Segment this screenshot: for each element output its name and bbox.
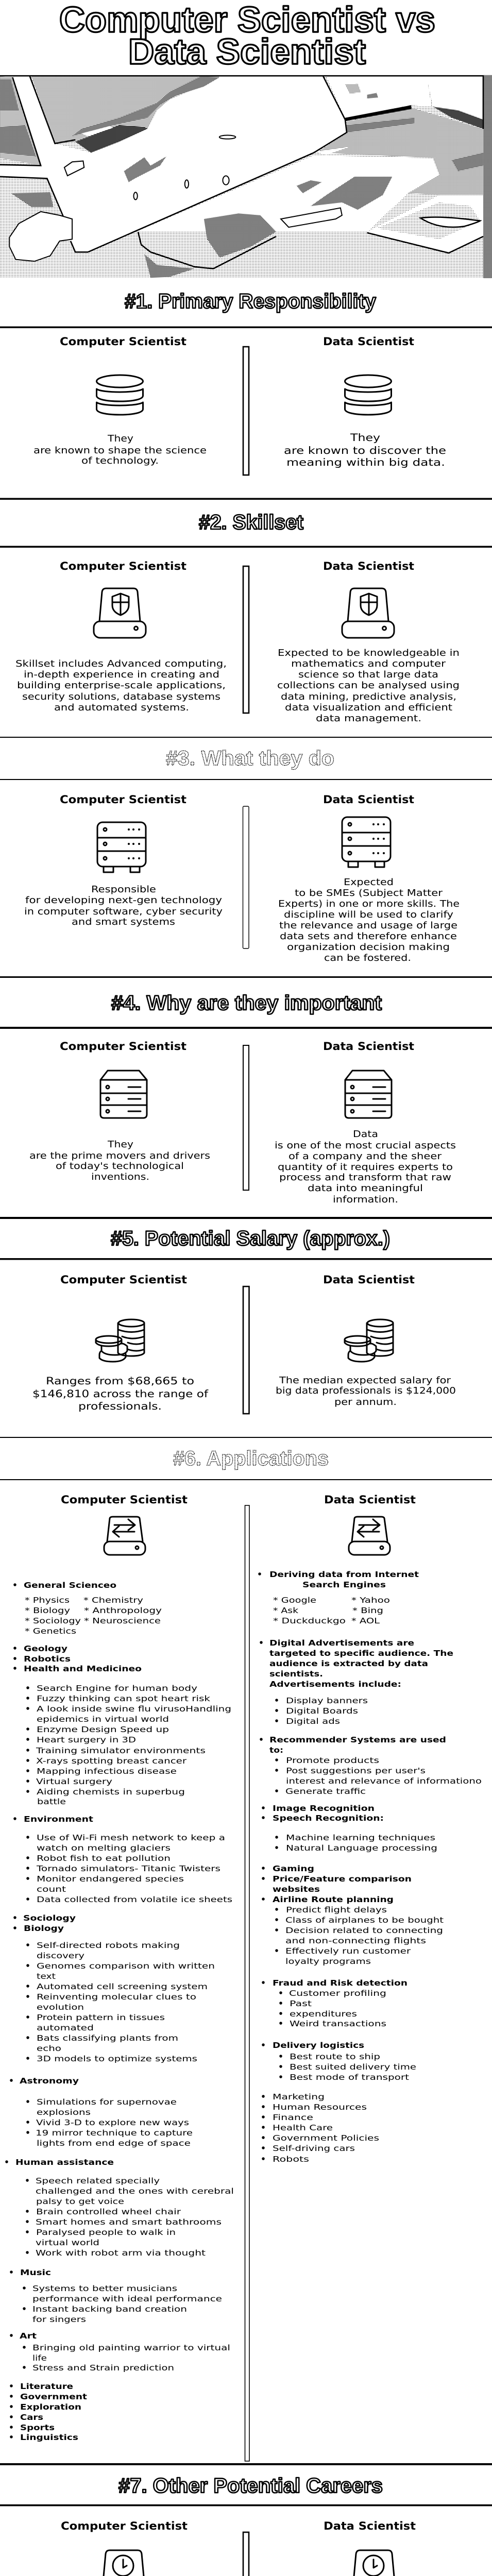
list: computer scientist applications: * Sociology bbox=[25, 1616, 81, 1625]
text: data scientist: information. bbox=[333, 1195, 398, 1205]
list: computer scientist applications: Mapping infectious disease bbox=[37, 1767, 177, 1776]
text: data scientist: big data professionals is $124,000 bbox=[276, 1386, 456, 1396]
text: computer scientist: and automated systems. bbox=[54, 703, 189, 713]
text: computer scientist: inventions. bbox=[91, 1172, 149, 1182]
column heading: Data Scientist bbox=[323, 1040, 414, 1053]
list: computer scientist applications: watch on melting glaciers bbox=[37, 1843, 171, 1853]
icon: drawer server bbox=[100, 1071, 147, 1118]
column separator bbox=[243, 347, 249, 475]
divider bbox=[0, 1027, 492, 1029]
list: data scientist applications: expenditures bbox=[290, 2009, 357, 2019]
list: data scientist applications: Display banners bbox=[286, 1696, 368, 1705]
list: computer scientist applications: Data collected from volatile ice sheets bbox=[37, 1895, 232, 1904]
list: computer scientist applications: Government bbox=[20, 2392, 88, 2401]
list: data scientist applications bbox=[269, 1570, 482, 2164]
column heading: Data Scientist bbox=[323, 560, 414, 572]
list: computer scientist applications: Vivid 3-D to explore new ways bbox=[36, 2118, 189, 2127]
text: data scientist: Expected to be knowledgeable in bbox=[278, 648, 460, 658]
list: computer scientist applications: Heart surgery in 3D bbox=[37, 1735, 136, 1744]
text: computer scientist: of today's technological bbox=[56, 1161, 184, 1172]
list: computer scientist applications: 3D models to optimize systems bbox=[37, 2054, 197, 2063]
icon: server rack bbox=[342, 817, 391, 867]
list: computer scientist applications: Music bbox=[20, 2268, 51, 2277]
panel: what they do bbox=[24, 793, 460, 963]
text: computer scientist: in computer software, cyber security bbox=[24, 907, 223, 917]
list: data scientist applications: Best route to ship bbox=[290, 2052, 380, 2061]
list: computer scientist applications: Training simulator environments bbox=[36, 1746, 206, 1755]
text: computer scientist: for developing next-gen technology bbox=[25, 895, 222, 906]
list: data scientist applications: Weird transactions bbox=[290, 2019, 386, 2028]
heading: #3 What they do: #3. What they do bbox=[166, 747, 334, 770]
text: data scientist bbox=[275, 1129, 456, 1205]
text: computer scientist: are known to shape the science bbox=[33, 446, 207, 456]
list: computer scientist applications: Simulations for supernovae bbox=[37, 2097, 177, 2107]
text: data scientist bbox=[284, 432, 446, 468]
list: data scientist applications: loyalty programs bbox=[285, 1957, 371, 1966]
list: data scientist applications: Robots bbox=[273, 2155, 309, 2164]
text: computer scientist: security solutions, database systems bbox=[22, 692, 220, 702]
text: computer scientist: They bbox=[107, 434, 133, 444]
text: data scientist: discipline will be used to clarify bbox=[284, 910, 453, 920]
list: computer scientist applications: Bats classifying plants from bbox=[37, 2033, 178, 2043]
list: data scientist applications: scientists. bbox=[269, 1669, 323, 1679]
column heading: Computer Scientist bbox=[60, 1274, 187, 1286]
column separator bbox=[243, 2532, 249, 2576]
panel: primary responsibility bbox=[33, 335, 446, 475]
heading: #2 Skillset: #2. Skillset bbox=[199, 511, 303, 534]
list: computer scientist applications: * Biology bbox=[25, 1606, 70, 1615]
column separator bbox=[243, 1045, 249, 1190]
text: data scientist bbox=[276, 1376, 456, 1408]
text: data scientist: data mining, predictive analysis, bbox=[281, 692, 456, 702]
list: data scientist applications: Best suited delivery time bbox=[290, 2062, 416, 2072]
column heading: Data Scientist bbox=[324, 2520, 416, 2532]
list: computer scientist applications: Astronomy bbox=[20, 2076, 79, 2086]
list: data scientist applications: to: bbox=[269, 1745, 283, 1755]
icon: database bbox=[345, 375, 392, 415]
list: data scientist applications: Health Care bbox=[273, 2123, 333, 2132]
text: computer scientist: Ranges from $68,665 to bbox=[46, 1375, 194, 1387]
hero image: dithered desk with laptop and Hadoop elephant bbox=[0, 75, 492, 278]
text: data scientist: organization decision making bbox=[287, 942, 450, 953]
list: computer scientist applications: Health and Medicineo bbox=[24, 1664, 142, 1673]
list: data scientist applications: websites bbox=[273, 1885, 320, 1894]
list: computer scientist applications: automated bbox=[37, 2023, 94, 2032]
list: data scientist applications: * Yahoo bbox=[351, 1596, 390, 1605]
list: computer scientist applications: A look inside swine flu virusoHandling bbox=[37, 1704, 231, 1714]
list: computer scientist applications: explosions bbox=[37, 2108, 91, 2117]
divider bbox=[0, 779, 492, 780]
list: computer scientist applications: Exploration bbox=[20, 2402, 81, 2412]
panel: applications bbox=[7, 1494, 482, 2461]
heading: #6 Applications: #6. Applications bbox=[173, 1447, 329, 1470]
list: computer scientist applications: * Physics bbox=[25, 1596, 70, 1605]
icon: coin stacks bbox=[96, 1319, 144, 1362]
text: computer scientist bbox=[29, 1140, 210, 1182]
divider bbox=[0, 498, 492, 500]
list: computer scientist applications: Self-directed robots making bbox=[37, 1941, 180, 1950]
text: data scientist: Expected bbox=[344, 877, 394, 888]
list: computer scientist applications: discovery bbox=[37, 1951, 84, 1960]
text: computer scientist bbox=[33, 434, 207, 466]
list: data scientist applications: Search Engines bbox=[302, 1580, 386, 1589]
list: computer scientist applications: Tornado simulators- Titanic Twisters bbox=[36, 1864, 220, 1873]
title: Computer Scientist vs bbox=[59, 0, 435, 40]
panel: why they are important bbox=[29, 1040, 456, 1205]
list: data scientist applications: audience is extracted by data bbox=[269, 1659, 428, 1668]
list: computer scientist applications: General Scienceo bbox=[24, 1581, 116, 1590]
divider bbox=[0, 1217, 492, 1219]
text: data scientist: data management. bbox=[316, 714, 421, 724]
list: data scientist applications: Advertisements include: bbox=[269, 1680, 401, 1689]
list: data scientist applications: * Ask bbox=[273, 1606, 298, 1615]
list: computer scientist applications: Speech related specially bbox=[36, 2176, 160, 2185]
list: computer scientist applications: * Anthropology bbox=[84, 1606, 162, 1615]
list: computer scientist applications: Automated cell screening system bbox=[37, 1982, 208, 1991]
list: computer scientist applications: Brain controlled wheel chair bbox=[36, 2207, 181, 2216]
text: computer scientist: in-depth experience in creating and bbox=[24, 670, 219, 680]
text: data scientist: of a company and the sheer bbox=[289, 1151, 442, 1162]
text: data scientist: data sets and therefore enhance bbox=[280, 931, 457, 942]
text: data scientist: are known to discover the bbox=[284, 445, 446, 456]
list: data scientist applications: Digital ads bbox=[286, 1717, 340, 1726]
list: data scientist applications: Speech Recognition: bbox=[273, 1814, 384, 1823]
text: data scientist: the relevance and usage of large bbox=[279, 921, 457, 931]
list: computer scientist applications: Human assistance bbox=[15, 2158, 114, 2167]
text: data scientist: can be fostered. bbox=[324, 953, 411, 963]
list: computer scientist applications: Fuzzy thinking can spot heart risk bbox=[37, 1694, 210, 1703]
text: computer scientist: They bbox=[107, 1140, 133, 1150]
text: computer scientist: building enterprise-scale applications, bbox=[17, 681, 226, 691]
list: computer scientist applications: Genomes comparison with written bbox=[37, 1961, 215, 1971]
list: data scientist applications: Human Resources bbox=[273, 2103, 367, 2112]
text: data scientist bbox=[278, 877, 460, 963]
list: data scientist applications: * AOL bbox=[351, 1616, 380, 1625]
list: computer scientist applications: Search Engine for human body bbox=[37, 1684, 197, 1693]
list: data scientist applications: Marketing bbox=[273, 2092, 325, 2102]
list: computer scientist applications: Sports bbox=[20, 2423, 55, 2432]
list: computer scientist applications: X-rays spotting breast cancer bbox=[36, 1756, 187, 1766]
text: data scientist: The median expected salary for bbox=[279, 1376, 451, 1386]
list: computer scientist applications: echo bbox=[37, 2044, 61, 2053]
list: data scientist applications: Predict flight delays bbox=[286, 1905, 387, 1914]
list: data scientist applications: Post suggestions per user's bbox=[286, 1766, 426, 1775]
list: data scientist applications: Image Recognition bbox=[273, 1804, 375, 1813]
list: computer scientist applications: for singers bbox=[32, 2315, 86, 2324]
list: computer scientist applications: Cars bbox=[20, 2413, 43, 2422]
heading: #1 Primary Responsibility: #1. Primary Responsibility bbox=[125, 290, 377, 313]
text: data scientist: meaning within big data. bbox=[286, 456, 445, 468]
list: computer scientist applications: epidemics in virtual world bbox=[37, 1715, 169, 1724]
list: computer scientist applications: count bbox=[37, 1885, 66, 1894]
divider bbox=[0, 2463, 492, 2465]
column heading: Computer Scientist bbox=[60, 793, 186, 806]
list: computer scientist applications: Use of Wi-Fi mesh network to keep a bbox=[37, 1833, 225, 1842]
list: data scientist applications: Recommender Systems are used bbox=[269, 1735, 446, 1744]
icon: transfer drive bbox=[349, 1517, 390, 1555]
list: computer scientist applications: performance with ideal performance bbox=[32, 2294, 222, 2303]
list: computer scientist applications: Work with robot arm via thought bbox=[36, 2248, 206, 2258]
text: data scientist: Experts) in one or more skills. The bbox=[278, 899, 460, 909]
list: computer scientist applications: Virtual surgery bbox=[36, 1777, 112, 1786]
list: computer scientist applications: * Chemistry bbox=[83, 1596, 143, 1605]
list: data scientist applications: Class of airplanes to be bought bbox=[285, 1916, 444, 1925]
text: computer scientist: Skillset includes Advanced computing, bbox=[15, 659, 227, 669]
divider bbox=[0, 1258, 492, 1260]
list: computer scientist applications: Biology bbox=[24, 1924, 64, 1933]
list: data scientist applications: * Duckduckgo bbox=[273, 1616, 346, 1625]
icon: drawer server bbox=[345, 1071, 392, 1118]
list: computer scientist applications: lights from end edge of space bbox=[37, 2139, 191, 2148]
list: data scientist applications: Price/Feature comparison bbox=[273, 1874, 412, 1884]
icon: clock drive bbox=[98, 2550, 149, 2576]
list: computer scientist applications bbox=[15, 1581, 234, 2442]
list: data scientist applications: Machine learning techniques bbox=[286, 1833, 435, 1842]
list: data scientist applications: Deriving data from Internet bbox=[269, 1570, 419, 1579]
icon: shield drive bbox=[94, 588, 146, 638]
divider bbox=[0, 976, 492, 978]
list: data scientist applications: targeted to specific audience. The bbox=[269, 1649, 453, 1658]
text: computer scientist: professionals. bbox=[78, 1400, 162, 1412]
text: data scientist: They bbox=[350, 432, 380, 444]
list: computer scientist applications: Literature bbox=[20, 2382, 73, 2391]
divider bbox=[0, 1437, 492, 1438]
list: data scientist applications: Airline Route planning bbox=[273, 1895, 394, 1904]
text: data scientist: is one of the most crucial aspects bbox=[275, 1141, 456, 1151]
list: data scientist applications: Government Policies bbox=[273, 2133, 379, 2143]
list: computer scientist applications: 19 mirror technique to capture bbox=[36, 2128, 193, 2138]
list: computer scientist applications: Systems to better musicians bbox=[32, 2284, 177, 2293]
text: computer scientist bbox=[24, 885, 223, 927]
column heading: Data Scientist bbox=[324, 1494, 416, 1506]
text: data scientist: Data bbox=[353, 1129, 378, 1140]
divider bbox=[0, 2504, 492, 2506]
list: computer scientist applications: Geology bbox=[24, 1644, 67, 1653]
column heading: Data Scientist bbox=[323, 1274, 415, 1286]
list: computer scientist applications: Smart homes and smart bathrooms bbox=[36, 2217, 222, 2227]
list: data scientist applications: Customer profiling bbox=[289, 1989, 386, 1998]
list: computer scientist applications: Reinventing molecular clues to bbox=[37, 1992, 196, 2002]
list: computer scientist applications: Linguistics bbox=[20, 2433, 78, 2442]
text: data scientist: collections can be analysed using bbox=[277, 681, 460, 691]
icon: transfer drive bbox=[104, 1517, 145, 1555]
column heading: Computer Scientist bbox=[60, 1040, 186, 1053]
text: computer scientist: of technology. bbox=[81, 456, 159, 466]
text: data scientist: mathematics and computer bbox=[291, 659, 446, 669]
text: data scientist: data into meaningful bbox=[308, 1183, 423, 1194]
panel: other potential careers bbox=[28, 2520, 457, 2576]
column heading: Computer Scientist bbox=[60, 335, 186, 348]
divider bbox=[0, 546, 492, 548]
list: data scientist applications: interest and relevance of informationo bbox=[286, 1776, 482, 1786]
heading: #5 Potential Salary: #5. Potential Salary (approx.) bbox=[111, 1227, 390, 1250]
column separator bbox=[243, 1286, 249, 1414]
panel: skillset bbox=[15, 560, 460, 724]
icon: shield drive bbox=[342, 588, 394, 638]
list: computer scientist applications: Enzyme Design Speed up bbox=[37, 1725, 169, 1734]
list: computer scientist applications: Protein pattern in tissues bbox=[37, 2013, 165, 2022]
text: computer scientist: Responsible bbox=[91, 885, 156, 895]
list: computer scientist applications: Instant backing band creation bbox=[32, 2304, 187, 2314]
list: computer scientist applications: Environment bbox=[24, 1815, 94, 1824]
text: computer scientist: and smart systems bbox=[72, 917, 175, 927]
panel: potential salary bbox=[32, 1274, 456, 1414]
list: data scientist applications: Delivery logistics bbox=[273, 2041, 364, 2050]
list: computer scientist applications: Paralysed people to walk in bbox=[36, 2228, 176, 2237]
list: computer scientist applications: * Neuroscience bbox=[84, 1616, 161, 1625]
text: computer scientist bbox=[32, 1375, 209, 1412]
list: computer scientist applications: Monitor endangered species bbox=[37, 1874, 184, 1884]
column heading: Data Scientist bbox=[323, 793, 414, 806]
heading: #7 Other Potential Careers: #7. Other Potential Careers bbox=[118, 2475, 383, 2497]
list: data scientist applications: Promote products bbox=[286, 1756, 379, 1765]
column heading: Data Scientist bbox=[323, 335, 414, 348]
title: Data Scientist bbox=[128, 31, 366, 72]
list: data scientist applications: and non-connecting flights bbox=[285, 1936, 426, 1945]
list: data scientist applications: Decision related to connecting bbox=[285, 1926, 443, 1935]
list: computer scientist applications: life bbox=[32, 2353, 47, 2363]
column separator bbox=[245, 1505, 249, 2461]
icon: server rack bbox=[97, 822, 146, 872]
icon: coin stacks bbox=[345, 1319, 393, 1362]
list: computer scientist applications: text bbox=[37, 1972, 56, 1981]
list bullets: data scientist bbox=[260, 1574, 281, 2159]
column heading: Computer Scientist bbox=[61, 2520, 188, 2532]
text: data scientist: per annum. bbox=[334, 1397, 397, 1408]
text: computer scientist: are the prime movers and drivers bbox=[29, 1151, 210, 1161]
list: computer scientist applications: Art bbox=[20, 2331, 37, 2341]
heading: #4 Why are they important: #4. Why are they important bbox=[111, 992, 382, 1014]
column separator bbox=[243, 806, 249, 948]
text: computer scientist bbox=[15, 659, 227, 713]
list: computer scientist applications: battle bbox=[37, 1797, 66, 1806]
text: data scientist: process and transform that raw bbox=[279, 1173, 451, 1183]
list: data scientist applications: Generate traffic bbox=[285, 1787, 366, 1796]
list: computer scientist applications: challenged and the ones with cerebral bbox=[36, 2187, 234, 2196]
column heading: Computer Scientist bbox=[61, 1494, 188, 1506]
list: data scientist applications: Natural Language processing bbox=[286, 1843, 437, 1853]
list: data scientist applications: Effectively run customer bbox=[285, 1946, 411, 1956]
column separator bbox=[243, 566, 249, 713]
list: computer scientist applications: evolution bbox=[37, 2003, 84, 2012]
text: data scientist: quantity of it requires experts to bbox=[278, 1162, 453, 1173]
icon: database bbox=[97, 375, 143, 415]
list: data scientist applications: Best mode of transport bbox=[290, 2073, 409, 2082]
text: computer scientist: $146,810 across the range of bbox=[32, 1388, 209, 1400]
list: computer scientist applications: Robotics bbox=[24, 1654, 71, 1664]
list: computer scientist applications: Sociology bbox=[23, 1913, 76, 1923]
divider bbox=[0, 1479, 492, 1480]
list: data scientist applications: Gaming bbox=[273, 1864, 314, 1873]
list: computer scientist applications: virtual world bbox=[36, 2238, 99, 2247]
list: data scientist applications: Finance bbox=[273, 2113, 313, 2122]
text: data scientist bbox=[277, 648, 460, 724]
list: computer scientist applications: Stress and Strain prediction bbox=[32, 2363, 174, 2372]
column heading: Computer Scientist bbox=[60, 560, 186, 572]
list: computer scientist applications: palsy to get voice bbox=[36, 2197, 124, 2206]
text: data scientist: data visualization and efficient bbox=[285, 703, 452, 713]
icon: clock drive bbox=[348, 2550, 399, 2576]
text: data scientist: science so that large data bbox=[298, 670, 438, 680]
list: computer scientist applications: Robot fish to eat pollution bbox=[37, 1854, 171, 1863]
list: computer scientist applications: Bringing old painting warrior to virtual bbox=[32, 2343, 230, 2352]
title bbox=[59, 0, 435, 72]
list: data scientist applications: Digital Boards bbox=[286, 1706, 358, 1716]
list: computer scientist applications: * Genetics bbox=[25, 1626, 76, 1636]
list: computer scientist applications: Aiding chemists in superbug bbox=[37, 1787, 185, 1797]
text: data scientist: to be SMEs (Subject Matter bbox=[295, 888, 443, 899]
divider bbox=[0, 327, 492, 328]
list: data scientist applications: * Bing bbox=[352, 1606, 383, 1615]
list bullets: computer scientist bbox=[7, 1585, 28, 2437]
list: data scientist applications: Past bbox=[290, 1999, 312, 2008]
list: data scientist applications: * Google bbox=[273, 1596, 316, 1605]
list: data scientist applications: Self-driving cars bbox=[273, 2144, 355, 2153]
list: data scientist applications: Fraud and Risk detection bbox=[273, 1978, 408, 1988]
list: data scientist applications: Digital Advertisements are bbox=[269, 1638, 414, 1648]
divider bbox=[0, 737, 492, 738]
